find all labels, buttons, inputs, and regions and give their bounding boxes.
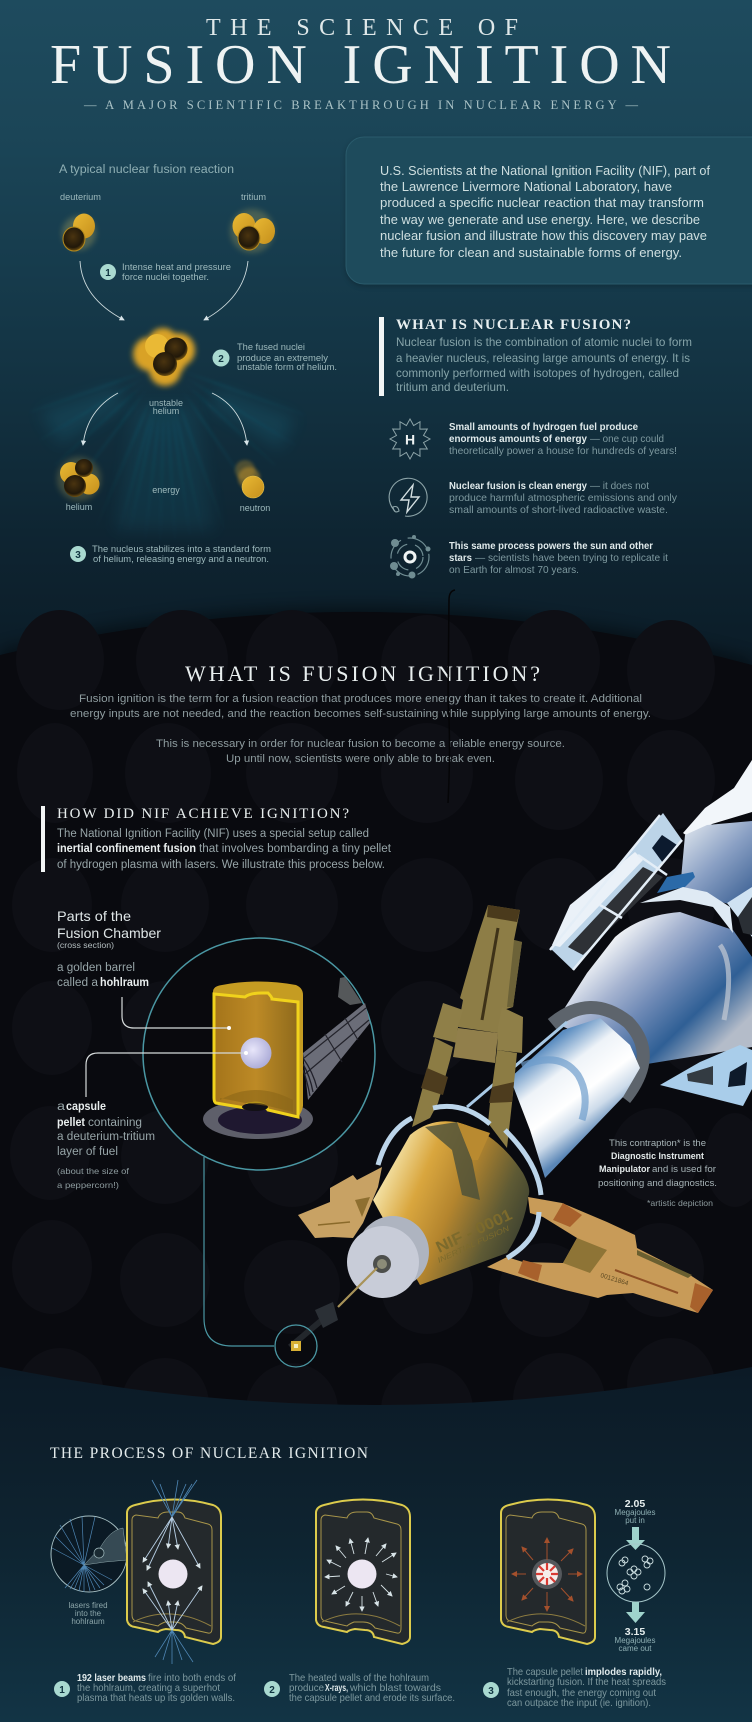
main cone body	[555, 912, 752, 1064]
definition text	[70, 693, 651, 765]
fact 2 text: Nuclear fusion is clean energy	[449, 480, 587, 492]
inset: lasers fired	[51, 1516, 127, 1592]
grey flange	[552, 1007, 643, 1099]
step 1 badge: 1	[105, 268, 111, 279]
arrow: energy in	[626, 1527, 645, 1550]
panel: intro: nuclear fusion and illustrate how this discovery may pave	[380, 229, 707, 243]
icon: tritium nucleus	[230, 209, 275, 253]
stage 2: hohlraum with x-rays	[316, 1500, 410, 1644]
step 1 text: plasma that heats up its golden walls.	[77, 1692, 235, 1704]
energy output label: 3.15	[625, 1626, 645, 1638]
step 1 badge	[100, 264, 116, 280]
energy input label: Megajoules	[615, 1508, 655, 1517]
white tip and rim	[683, 760, 752, 838]
hohlraum label: hohlraum	[100, 977, 149, 989]
title line 1: THE SCIENCE OF	[206, 15, 518, 41]
base plate	[203, 1099, 313, 1139]
step 2 badge	[264, 1681, 280, 1697]
inset label	[68, 1601, 108, 1626]
white tube	[510, 1018, 640, 1178]
step 1 text: force nuclei together.	[122, 272, 209, 282]
top section background	[0, 0, 752, 680]
arrow: to helium	[83, 393, 118, 445]
label deuterium: deuterium	[60, 192, 101, 202]
step 3 badge: 3	[75, 550, 81, 561]
caption: machine	[598, 1138, 717, 1208]
panel: parts of the fusion chamber text	[57, 908, 161, 1190]
panel: intro: the way we generate and use energy. Here, we describe	[380, 213, 700, 227]
tube band	[522, 1060, 585, 1120]
description: a heavier nucleus, releasing large amounts of energy. It is	[396, 351, 690, 365]
accent bar	[379, 317, 384, 396]
fact 3 text: This same process powers the sun and other	[449, 540, 653, 552]
zoom circle: fusion chamber cross section	[143, 938, 375, 1170]
leader: capsule	[86, 1051, 248, 1097]
cone engraving: NIF - 0001	[434, 1207, 515, 1257]
end cap	[347, 1216, 429, 1298]
cross section note: (cross section)	[57, 940, 114, 950]
left gold arm	[298, 1167, 382, 1238]
capsule label: containing	[88, 1117, 142, 1129]
capsule label: a peppercorn!)	[57, 1180, 119, 1190]
step 2 badge: 2	[218, 354, 224, 365]
panel: how did NIF achieve ignition	[41, 806, 392, 872]
energy output label	[615, 1626, 655, 1653]
right bracket upper	[727, 887, 752, 937]
panel: intro: produced a specific nuclear reaction that may transform	[380, 196, 704, 210]
step 2 text: X-rays,	[325, 1682, 348, 1694]
hohlraum barrel	[213, 982, 303, 1117]
step 2 text: The heated walls of the hohlraum	[289, 1672, 429, 1684]
arrow: tritium to fusion	[204, 261, 248, 320]
step 3 text: kickstarting fusion. If the heat spreads	[507, 1676, 666, 1688]
caption: machine: Manipulator	[599, 1164, 650, 1175]
capsule label: a deuterium-tritium	[57, 1131, 155, 1143]
step 2 text: produce	[289, 1682, 324, 1694]
heading line 2: Fusion Chamber	[57, 925, 161, 941]
subtitle: — A MAJOR SCIENTIFIC BREAKTHROUGH IN NUCLEAR ENERGY —	[83, 98, 638, 112]
fact 1 text: Small amounts of hydrogen fuel produce	[449, 421, 638, 433]
icon: hydrogen star	[390, 419, 430, 459]
fact 3 text: on Earth for almost 70 years.	[449, 564, 579, 576]
energy rays	[30, 365, 305, 545]
definition text: This is necessary in order for nuclear fusion to become a reliable energy source.	[156, 738, 565, 750]
small target circle	[275, 1325, 317, 1367]
heading: WHAT IS FUSION IGNITION?	[185, 661, 540, 686]
description: commonly performed with isotopes of hydrogen, called	[396, 366, 679, 380]
inset label: into the	[75, 1609, 102, 1618]
lower right bracket	[660, 1045, 752, 1106]
stage 3: hohlraum with implosion	[501, 1500, 595, 1644]
energy output label: Megajoules	[615, 1636, 655, 1645]
heading: HOW DID NIF ACHIEVE IGNITION?	[57, 806, 349, 822]
step 3 text: The nucleus stabilizes into a standard form	[92, 544, 271, 554]
arrow: to neutron	[212, 393, 247, 445]
capsule label: capsule	[66, 1101, 106, 1113]
cone engraving small: INERTIAL FUSION	[436, 1223, 511, 1265]
accent bar	[41, 806, 45, 872]
step 2 badge	[212, 350, 230, 366]
panel: typical fusion reaction diagram	[57, 164, 337, 564]
step 3 badge	[483, 1682, 499, 1698]
upper-left bracket	[550, 813, 682, 970]
icon: sun process	[390, 535, 430, 578]
heading: Parts of the	[57, 908, 131, 924]
capsule label: (about the size of	[57, 1166, 130, 1176]
heading: WHAT IS NUCLEAR FUSION?	[396, 317, 631, 333]
white cone rims	[378, 1106, 541, 1258]
panel: intro	[346, 137, 752, 286]
title	[50, 15, 671, 112]
capsule pellet	[240, 1038, 272, 1068]
inner cone highlight	[720, 945, 729, 1020]
step 3 badge	[70, 546, 86, 562]
step 3 text: can outpace the input (ie. ignition).	[507, 1697, 651, 1709]
step 2 text	[289, 1672, 455, 1704]
grey stalk	[303, 1003, 370, 1100]
bottom section background	[0, 1367, 752, 1722]
capsule label: pellet	[57, 1117, 85, 1129]
panel: intro: U.S. Scientists at the National Ignition Facility (NIF), part of	[380, 164, 711, 178]
inset label: hohlraum	[71, 1617, 105, 1626]
step 1 text: the hohlraum, creating a superhot	[77, 1682, 220, 1694]
grey mounting block	[338, 977, 362, 1005]
step 2 text: unstable form of helium.	[237, 362, 337, 372]
label neutron: neutron	[240, 503, 270, 513]
step 2 text: The fused nuclei	[237, 342, 305, 352]
leader: hohlraum	[122, 997, 231, 1030]
upper body	[680, 821, 752, 905]
fusion reaction mini diagram	[607, 1544, 665, 1602]
step 1 badge: 1	[59, 1685, 65, 1696]
caption: machine: positioning and diagnostics.	[598, 1178, 717, 1189]
energy input label: 2.05	[625, 1498, 645, 1510]
fact 3 text: stars	[449, 552, 472, 564]
fact 2 text	[449, 480, 678, 516]
panel: what is fusion ignition	[70, 661, 651, 765]
lower right arm	[487, 1197, 713, 1313]
icon: deuterium nucleus	[62, 214, 96, 251]
caption: machine: and is used for	[652, 1164, 716, 1175]
caption: machine: This contraption* is the	[609, 1138, 706, 1149]
caption: machine: *artistic depiction	[647, 1198, 713, 1208]
icon: hydrogen star: H	[405, 432, 415, 448]
label helium: helium	[66, 502, 92, 512]
fact 1 text	[449, 421, 677, 457]
fact 2 text: produce harmful atmospheric emissions and only	[449, 492, 678, 504]
upper gold arm	[412, 905, 523, 1148]
step 1 text: fire into both ends of	[148, 1672, 236, 1684]
hohlraum label	[57, 962, 149, 989]
label unstable helium	[149, 398, 183, 416]
fact 3 text: — scientists have been trying to replicate it	[475, 552, 668, 564]
title line 2: FUSION IGNITION	[50, 34, 671, 96]
fact 3 text	[449, 540, 668, 576]
energy input label: put in	[625, 1516, 645, 1525]
step 3 text	[92, 544, 271, 564]
capsule label	[57, 1101, 155, 1190]
dark section background	[0, 607, 752, 1457]
step 3 badge: 3	[488, 1686, 494, 1697]
arrow: deuterium to fusion	[80, 261, 124, 320]
cone shadow	[425, 1122, 490, 1200]
step 1 badge	[54, 1681, 70, 1697]
description: The National Ignition Facility (NIF) uses a special setup called	[57, 828, 369, 840]
step 2 text: the capsule pellet and erode its surface.	[289, 1692, 455, 1704]
hohlraum label: a golden barrel	[57, 962, 135, 974]
stage 1: hohlraum with lasers	[127, 1480, 221, 1664]
label unstable helium: unstable	[149, 398, 183, 408]
description	[57, 828, 392, 871]
arrow: energy out	[626, 1602, 645, 1623]
step 1 text: Intense heat and pressure	[122, 262, 231, 272]
label tritium: tritium	[241, 192, 266, 202]
panel: what is nuclear fusion	[379, 317, 692, 578]
fact 1 text: theoretically power a house for hundreds of years!	[449, 445, 677, 457]
description: inertial confinement fusion	[57, 843, 196, 855]
step 1 text	[77, 1672, 236, 1704]
label unstable helium: helium	[153, 406, 179, 416]
gold cone	[373, 1121, 529, 1285]
step 3 text: of helium, releasing energy and a neutron.	[93, 554, 269, 564]
description: that involves bombarding a tiny pellet	[199, 843, 392, 855]
step 1 text	[122, 262, 231, 282]
description	[396, 335, 692, 394]
description: of hydrogen plasma with lasers. We illustrate this process below.	[57, 859, 385, 871]
icon: unstable helium	[133, 328, 195, 386]
step 3 text	[507, 1666, 666, 1709]
ring band	[640, 887, 733, 933]
energy output label: came out	[619, 1644, 652, 1653]
panel: intro: the Lawrence Livermore National Laboratory, have	[380, 180, 672, 194]
step 2 text: produce an extremely	[237, 353, 329, 363]
icon: neutron	[235, 460, 264, 498]
dark blue strip	[657, 872, 695, 893]
heading: THE PROCESS OF NUCLEAR IGNITION	[50, 1445, 368, 1462]
definition text: Fusion ignition is the term for a fusion reaction that produces more energy than it takes to create it. Additional	[79, 693, 642, 705]
thin rod	[467, 1022, 567, 1107]
fact 1 text: — one cup could	[590, 433, 664, 445]
capsule label: a	[57, 1101, 66, 1113]
definition text: Up until now, scientists were only able to break even.	[226, 753, 495, 765]
lower right arm: 00121864	[599, 1272, 629, 1287]
scratch line	[448, 590, 455, 803]
icon: helium	[57, 457, 101, 501]
step 2 text	[237, 342, 337, 372]
capsule label: layer of fuel	[57, 1146, 118, 1158]
inset label: lasers fired	[68, 1601, 108, 1610]
panel: intro: the future for clean and sustainable forms of energy.	[380, 246, 682, 260]
connector	[290, 1302, 338, 1347]
step 3 text: The capsule pellet	[507, 1666, 583, 1678]
icon: clean energy bolt	[389, 478, 427, 516]
description: Nuclear fusion is the combination of atomic nuclei to form	[396, 335, 692, 349]
panel: the process of nuclear ignition	[50, 1445, 666, 1709]
hohlraum label: called a	[57, 977, 99, 989]
step 3 text: fast enough, the energy coming out	[507, 1687, 656, 1699]
zoom connector line	[204, 1157, 274, 1346]
label energy: energy	[152, 485, 180, 495]
diagram heading: A typical nuclear fusion reaction	[59, 164, 234, 176]
step 3 text: implodes rapidly,	[585, 1666, 662, 1678]
step 1 text: 192 laser beams	[77, 1672, 146, 1684]
fact 1 text: enormous amounts of energy	[449, 433, 587, 445]
caption: machine: Diagnostic Instrument	[611, 1151, 705, 1162]
fact 2 text: — it does not	[590, 480, 649, 492]
energy input label	[615, 1498, 655, 1525]
fact 2 text: small amounts of short-lived radioactive waste.	[449, 504, 668, 516]
gold rod	[338, 1268, 377, 1307]
Diagnostic Instrument Manipulator illustration	[290, 760, 752, 1347]
step 2 text: which blast towards	[349, 1682, 441, 1694]
description: tritium and deuterium.	[396, 380, 509, 394]
step 2 badge: 2	[269, 1685, 275, 1696]
definition text: energy inputs are not needed, and the reaction becomes self-sustaining while supplying large amounts of energy.	[70, 708, 651, 720]
